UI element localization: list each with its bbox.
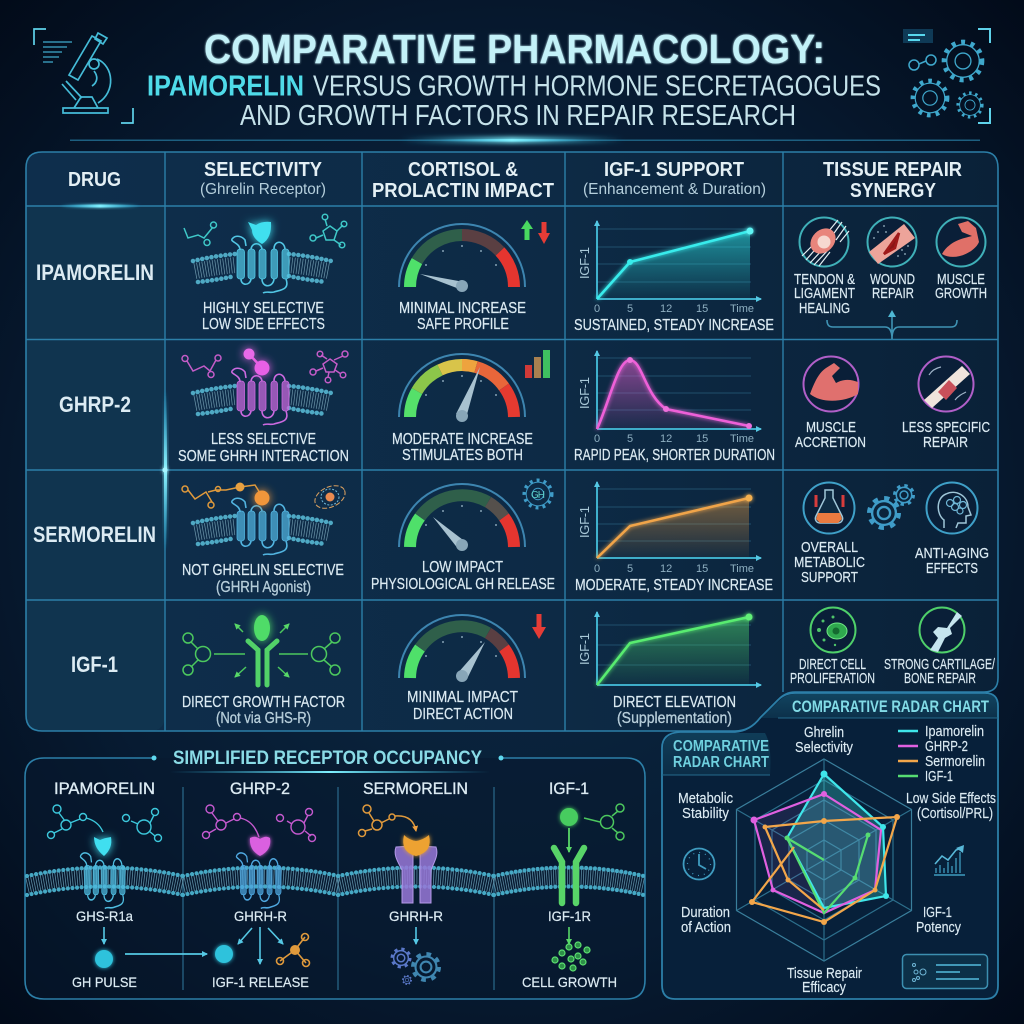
title: IPAMORELIN [147,70,304,102]
chart: sermorelin IGF-1: 5 [627,563,633,575]
table header row: CORTISOL & [408,159,518,181]
selectivity: IGF-1: (Not via GHS-R) [216,710,311,727]
gauge: ipamorelin cortisol: SAFE PROFILE [417,316,509,333]
receptor: ipamorelin: IPAMORELIN [54,779,155,798]
chart: GHRP-2 IGF-1: 15 [696,433,708,445]
tissue repair: ipamorelin: GROWTH [935,286,987,302]
receptor: ipamorelin: GH PULSE [72,974,137,990]
selectivity: sermorelin [182,481,349,596]
receptor: sermorelin: GHRH-R [389,908,443,924]
selectivity: IGF-1: DIRECT GROWTH FACTOR [182,694,345,711]
tissue repair: sermorelin: OVERALL [801,540,858,556]
receptor: IGF-1: CELL GROWTH [522,974,617,990]
tissue repair: GHRP-2 [795,356,990,451]
receptor: GHRP-2: IGF-1 RELEASE [212,974,309,990]
tissue repair: IGF-1: BONE REPAIR [904,671,976,687]
chart: GHRP-2 IGF-1: IGF-1 [577,377,592,409]
radar axis labels: Potency [916,920,962,936]
chart: sermorelin IGF-1: MODERATE, STEADY INCREASE [575,577,773,594]
radar axis labels: Metabolic [678,791,733,807]
title divider [70,137,980,143]
tissue repair: sermorelin: METABOLIC [794,555,865,571]
radar axis labels [678,725,996,996]
tissue repair: ipamorelin: TENDON & [794,272,855,288]
gauge: sermorelin cortisol: LOW IMPACT [422,559,503,576]
radar legend: Ipamorelin [925,724,984,740]
receptor: sermorelin: SERMORELIN [363,779,468,798]
chart: ipamorelin IGF-1: 12 [660,303,672,315]
radar axis labels: Ghrelin [804,725,844,741]
panel: comparison table [26,152,998,731]
drug names column: SERMORELIN [33,522,156,547]
gauge: GHRP-2 cortisol [392,350,550,464]
tissue repair: sermorelin: EFFECTS [926,561,978,577]
table header row: IGF-1 SUPPORT [604,159,744,181]
chart: GHRP-2 IGF-1: 0 [594,433,600,445]
receptor: sermorelin [358,779,468,984]
selectivity: GHRP-2: LESS SELECTIVE [211,431,316,448]
panel: comparative radar chart [662,693,998,999]
title: VERSUS GROWTH HORMONE SECRETAGOGUES [313,70,881,102]
chart: sermorelin IGF-1 [575,482,773,594]
tissue repair: ipamorelin: WOUND [870,272,915,288]
receptor: GHRP-2 [202,779,316,990]
drug names column: GHRP-2 [59,392,131,417]
gauge: IGF-1 cortisol: MINIMAL IMPACT [407,689,518,706]
radar axis labels: (Cortisol/PRL) [917,806,993,822]
tissue repair: IGF-1: DIRECT CELL [799,657,866,673]
tissue repair: GHRP-2: LESS SPECIFIC [902,420,990,436]
tissue repair: sermorelin: ANTI-AGING [915,546,989,562]
gauge: ipamorelin cortisol [399,220,550,333]
radar axis labels: Efficacy [802,980,847,996]
chart: sermorelin IGF-1: IGF-1 [577,506,592,538]
chart: sermorelin IGF-1: 12 [660,563,672,575]
table header row: (Ghrelin Receptor) [200,181,326,198]
gauge: GHRP-2 cortisol: MODERATE INCREASE [392,431,533,448]
table header row [68,159,963,202]
panel: comparative radar chart: COMPARATIVE [673,738,769,755]
chart: IGF-1 IGF-1 [577,612,761,727]
table header row: TISSUE REPAIR [823,159,963,181]
chart: ipamorelin IGF-1: 5 [627,303,633,315]
tissue repair: sermorelin [794,482,989,586]
selectivity: sermorelin: (GHRH Agonist) [216,579,311,596]
table header row: SYNERGY [850,180,937,202]
tissue repair: GHRP-2: REPAIR [923,435,968,451]
gauge: sermorelin cortisol: PHYSIOLOGICAL GH RELEASE [371,576,555,593]
icon: clock [684,848,714,880]
title: COMPARATIVE PHARMACOLOGY: [204,26,825,72]
gauge: IGF-1 cortisol [399,614,546,723]
panel: simplified receptor occupancy [25,747,645,999]
radar legend: GHRP-2 [925,739,968,755]
receptor: IGF-1: IGF-1 [549,779,589,798]
chart: ipamorelin IGF-1: SUSTAINED, STEADY INCREASE [574,317,774,334]
selectivity: ipamorelin: HIGHLY SELECTIVE [203,300,324,317]
title: AND GROWTH FACTORS IN REPAIR RESEARCH [240,100,796,132]
icon: data card [902,954,988,988]
chart: IGF-1 IGF-1: (Supplementation) [617,710,732,727]
radar axis labels: Low Side Effects [906,791,996,807]
chart: GHRP-2 IGF-1: 12 [660,433,672,445]
chart: ipamorelin IGF-1: IGF-1 [577,247,592,279]
tissue repair: ipamorelin: MUSCLE [937,272,985,288]
radar legend [898,724,985,785]
radar axis labels: Tissue Repair [787,966,862,982]
chart: sermorelin IGF-1: Time [730,563,754,575]
chart: IGF-1 IGF-1: IGF-1 [577,633,592,665]
tissue repair: ipamorelin: REPAIR [872,286,914,302]
drug names column [33,260,156,677]
table header row: DRUG [68,169,121,191]
radar axis labels: of Action [681,920,731,936]
tissue repair: ipamorelin: LIGAMENT [794,286,855,302]
drug names column: IPAMORELIN [36,260,154,285]
chart: ipamorelin IGF-1: 15 [696,303,708,315]
radar legend: Sermorelin [925,754,985,770]
receptor: GHRP-2: GHRP-2 [230,779,290,798]
radar axis labels: Stability [682,806,730,822]
selectivity: GHRP-2 [178,348,349,465]
chart: GHRP-2 IGF-1 [574,351,775,464]
chart: ipamorelin IGF-1: 0 [594,303,600,315]
tissue repair: GHRP-2: ACCRETION [795,435,866,451]
tissue repair: sermorelin: SUPPORT [801,570,858,586]
chart: sermorelin IGF-1: 0 [594,563,600,575]
chart: IGF-1 IGF-1: DIRECT ELEVATION [613,694,736,711]
table header row: SELECTIVITY [204,159,323,181]
chart: ipamorelin IGF-1 [574,221,774,334]
radar legend: IGF-1 [925,769,953,785]
gauge: GHRP-2 cortisol: STIMULATES BOTH [402,447,523,464]
icon: microscope [34,29,133,123]
icon: gears [903,29,990,123]
tissue repair: GHRP-2: MUSCLE [806,420,856,436]
radar axis labels: Selectivity [795,740,854,756]
chart: GHRP-2 IGF-1: Time [730,433,754,445]
receptor: IGF-1: IGF-1R [548,908,591,924]
selectivity: GHRP-2: SOME GHRH INTERACTION [178,448,349,465]
gauge: ipamorelin cortisol: MINIMAL INCREASE [399,300,526,317]
heading: receptor occupancy: SIMPLIFIED RECEPTOR OCCUPANCY [173,747,482,769]
selectivity: IGF-1 [182,615,345,727]
gauge: IGF-1 cortisol: DIRECT ACTION [413,706,513,723]
receptor: ipamorelin: GHS-R1a [76,908,133,924]
radar axis labels: Duration [681,905,730,921]
receptor: ipamorelin [48,779,162,990]
arrow: GH pulse to IGF-1 release [125,953,207,955]
receptor: GHRP-2: GHRH-R [234,908,287,924]
tissue repair: IGF-1: PROLIFERATION [790,671,875,687]
chart: sermorelin IGF-1: 15 [696,563,708,575]
radar grid and data [736,759,912,961]
chart: GHRP-2 IGF-1: 5 [627,433,633,445]
icon: rising chart [934,845,965,875]
panel: comparative radar chart: RADAR CHART [673,754,769,771]
drug names column: IGF-1 [71,652,118,677]
tissue repair: IGF-1 [790,608,996,687]
selectivity: sermorelin: NOT GHRELIN SELECTIVE [182,562,344,579]
tissue repair: ipamorelin [794,218,987,339]
chart: GHRP-2 IGF-1: RAPID PEAK, SHORTER DURATION [574,447,775,464]
table header row: PROLACTIN IMPACT [372,180,554,202]
selectivity: ipamorelin: LOW SIDE EFFECTS [202,316,325,333]
radar axis labels: IGF-1 [923,905,952,921]
chart: ipamorelin IGF-1: Time [730,303,754,315]
selectivity: ipamorelin [184,214,347,333]
gauge: sermorelin cortisol: GH [531,490,545,501]
gauge: sermorelin cortisol [371,480,555,593]
receptor: IGF-1 [522,779,624,990]
title [147,26,881,132]
table header row: (Enhancement & Duration) [583,181,766,198]
tissue repair: ipamorelin: HEALING [799,301,850,317]
